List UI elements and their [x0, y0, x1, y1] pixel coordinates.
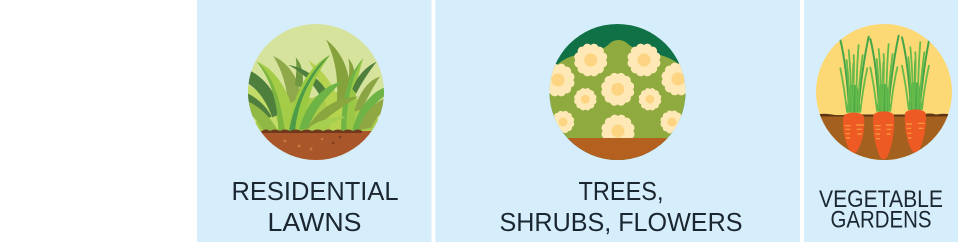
panel: residential lawns	[197, 0, 432, 242]
panel: trees, shrubs, flowers	[436, 0, 800, 242]
carrots	[843, 109, 926, 159]
panel: vegetable gardens	[804, 0, 958, 242]
flowers	[550, 44, 686, 138]
icon: grass and soil	[247, 24, 385, 161]
infographic	[197, 0, 958, 242]
icon: flowering shrub	[550, 24, 686, 160]
heading line: lawns: LAWNS	[268, 209, 362, 237]
heading line: residential: RESIDENTIAL	[232, 178, 398, 206]
heading line: gardens: GARDENS	[830, 206, 932, 234]
heading line: shrubs, flowers: SHRUBS, FLOWERS	[500, 209, 742, 237]
icon: carrots in soil	[816, 24, 952, 161]
carrot leaves	[840, 34, 930, 113]
carrot highlights	[845, 123, 925, 139]
heading line: trees: TREES,	[578, 178, 664, 206]
heading line: vegetable: VEGETABLE	[819, 186, 943, 213]
